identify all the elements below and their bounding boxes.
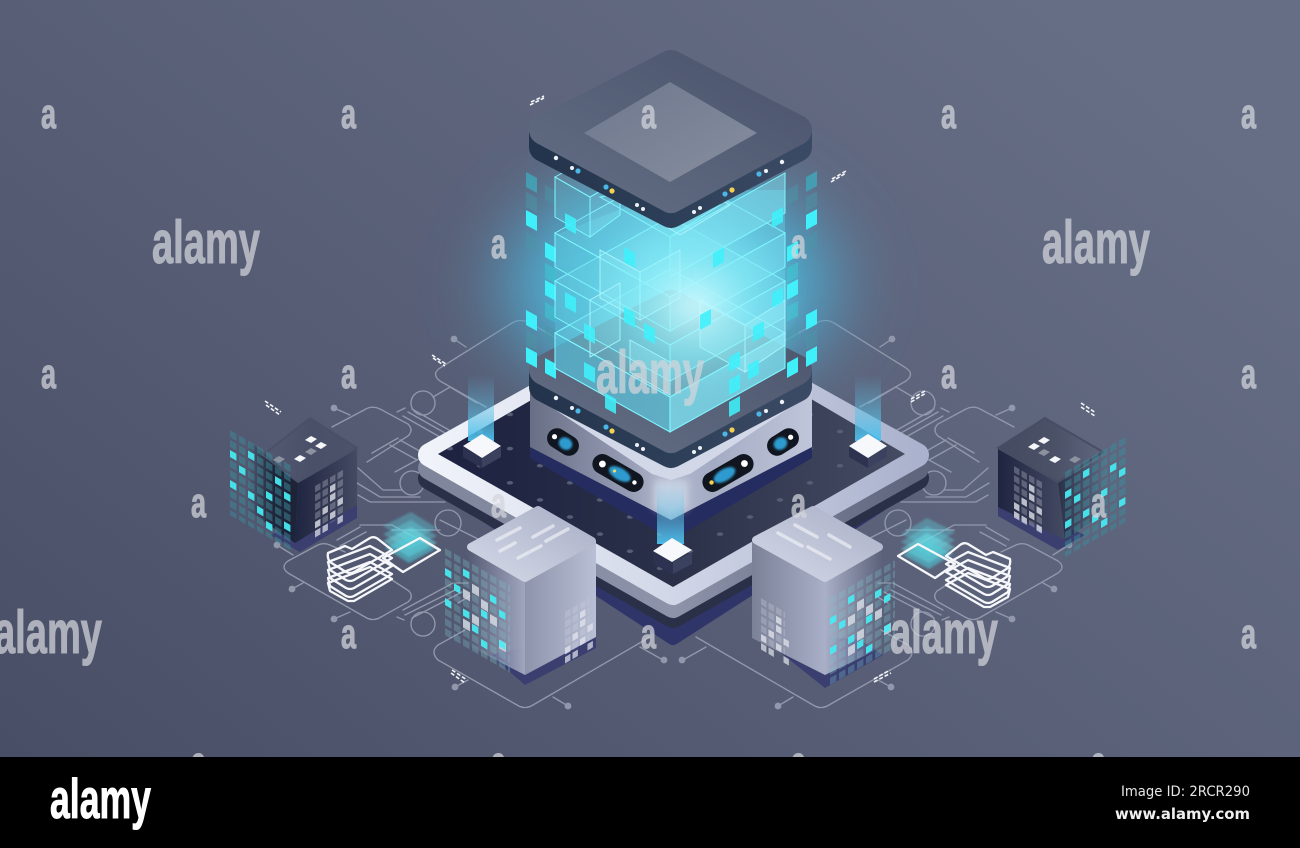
watermark: a: [641, 610, 656, 657]
watermark: a: [491, 479, 506, 526]
pixels on left face: [1014, 466, 1044, 535]
white layered stack right: [898, 518, 1010, 607]
circuit lines left: [274, 320, 667, 709]
tray inner floor: [438, 318, 905, 587]
watermark: a: [341, 90, 356, 137]
front pixels: [565, 207, 783, 417]
pixels on right face: [315, 470, 343, 538]
watermark: alamy: [596, 339, 704, 406]
watermark: a: [1241, 610, 1256, 657]
watermark: a: [941, 90, 956, 137]
small code marks: [265, 96, 1096, 683]
label dashes: [497, 526, 568, 558]
third cube layer: [555, 217, 785, 381]
watermark: a: [341, 350, 356, 397]
bottom cube layer: [555, 269, 785, 432]
pixels on left face: [230, 430, 293, 552]
flanking pixel columns: [526, 171, 817, 379]
watermark: a: [1241, 350, 1256, 397]
watermark: a: [491, 220, 506, 267]
watermark: a: [1241, 90, 1256, 137]
tray base: [430, 342, 917, 616]
pixels on right face: [830, 560, 895, 686]
watermark: a: [191, 479, 206, 526]
top squares: [1028, 437, 1061, 463]
drum capsule lights: [543, 425, 803, 496]
pixels on left face: [761, 598, 789, 666]
footer bar: [0, 757, 1300, 848]
left chip: [463, 434, 501, 468]
watermark: a: [641, 90, 656, 137]
pixels on right face: [565, 596, 593, 664]
watermark: a: [941, 350, 956, 397]
right beam: [855, 375, 881, 441]
upper cap: [544, 65, 797, 214]
label dashes: [778, 525, 850, 559]
watermark: a: [791, 738, 806, 785]
watermark: a: [1091, 738, 1106, 785]
central glow core: [590, 213, 800, 397]
watermark: a: [191, 738, 206, 785]
inner small cubes: [590, 180, 785, 395]
hologram data cubes: [526, 160, 817, 432]
white server right: [752, 510, 895, 688]
pixels on right face: [1065, 435, 1128, 557]
white layered stack left: [328, 512, 440, 601]
footer logo: alamy: [50, 767, 151, 830]
right chip: [849, 434, 887, 468]
watermark: a: [791, 479, 806, 526]
center beam: [657, 482, 684, 544]
platform shadow: [470, 400, 880, 638]
watermark: a: [791, 220, 806, 267]
left beam: [468, 375, 494, 441]
central server platform: [430, 305, 917, 638]
drum shadow: [530, 445, 812, 540]
upper cap center plate: [584, 82, 757, 182]
watermark: alamy: [1042, 209, 1150, 276]
watermark: a: [41, 350, 56, 397]
column fill: [555, 190, 785, 432]
watermark: a: [41, 90, 56, 137]
top squares: [294, 436, 327, 462]
image id: Image ID: 2RCR290: [1121, 784, 1250, 800]
lower cap: [544, 305, 797, 454]
top cube layer: [555, 160, 785, 277]
center chip: [653, 538, 692, 574]
watermark: alamy: [152, 209, 260, 276]
watermark: alamy: [890, 599, 998, 666]
watermark: a: [491, 738, 506, 785]
pixels on left face: [445, 548, 510, 674]
watermark: a: [341, 610, 356, 657]
watermark: a: [1091, 479, 1106, 526]
watermark: [0, 90, 1256, 785]
website: www.alamy.com: [1115, 805, 1250, 823]
dark cube left: [230, 418, 357, 552]
tray top: [430, 319, 917, 593]
circuit lines right: [679, 320, 1072, 709]
dark cube right: [998, 418, 1128, 557]
drum faces: [530, 380, 812, 520]
second cube layer: [555, 169, 785, 331]
white server left: [445, 510, 596, 685]
column glow: [455, 135, 885, 435]
